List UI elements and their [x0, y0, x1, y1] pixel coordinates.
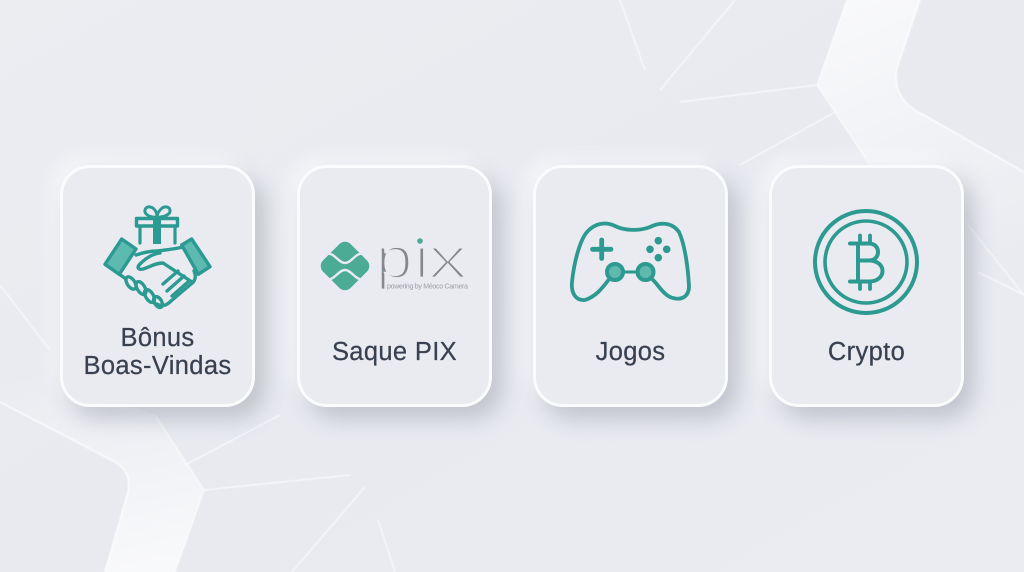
logo: PIX: x [428, 225, 468, 290]
label: Bônus Boas-Vindas [84, 324, 231, 380]
logo: PIX: powering by Méoco Camera [387, 284, 468, 290]
card: Bônus Boas-Vindas [60, 165, 255, 407]
card: Jogos [533, 165, 728, 407]
label: Bônus Boas-Vindas: Boas-Vindas [84, 352, 231, 380]
label: Jogos: Jogos [596, 338, 665, 366]
label: Bônus Boas-Vindas: Bônus [120, 324, 195, 352]
card: Saque PIX [297, 165, 492, 407]
logo: PIX: pı [376, 226, 431, 291]
card: Crypto [769, 165, 964, 407]
label: Saque PIX: Saque PIX [332, 338, 457, 366]
label: Crypto: Crypto [828, 338, 905, 366]
